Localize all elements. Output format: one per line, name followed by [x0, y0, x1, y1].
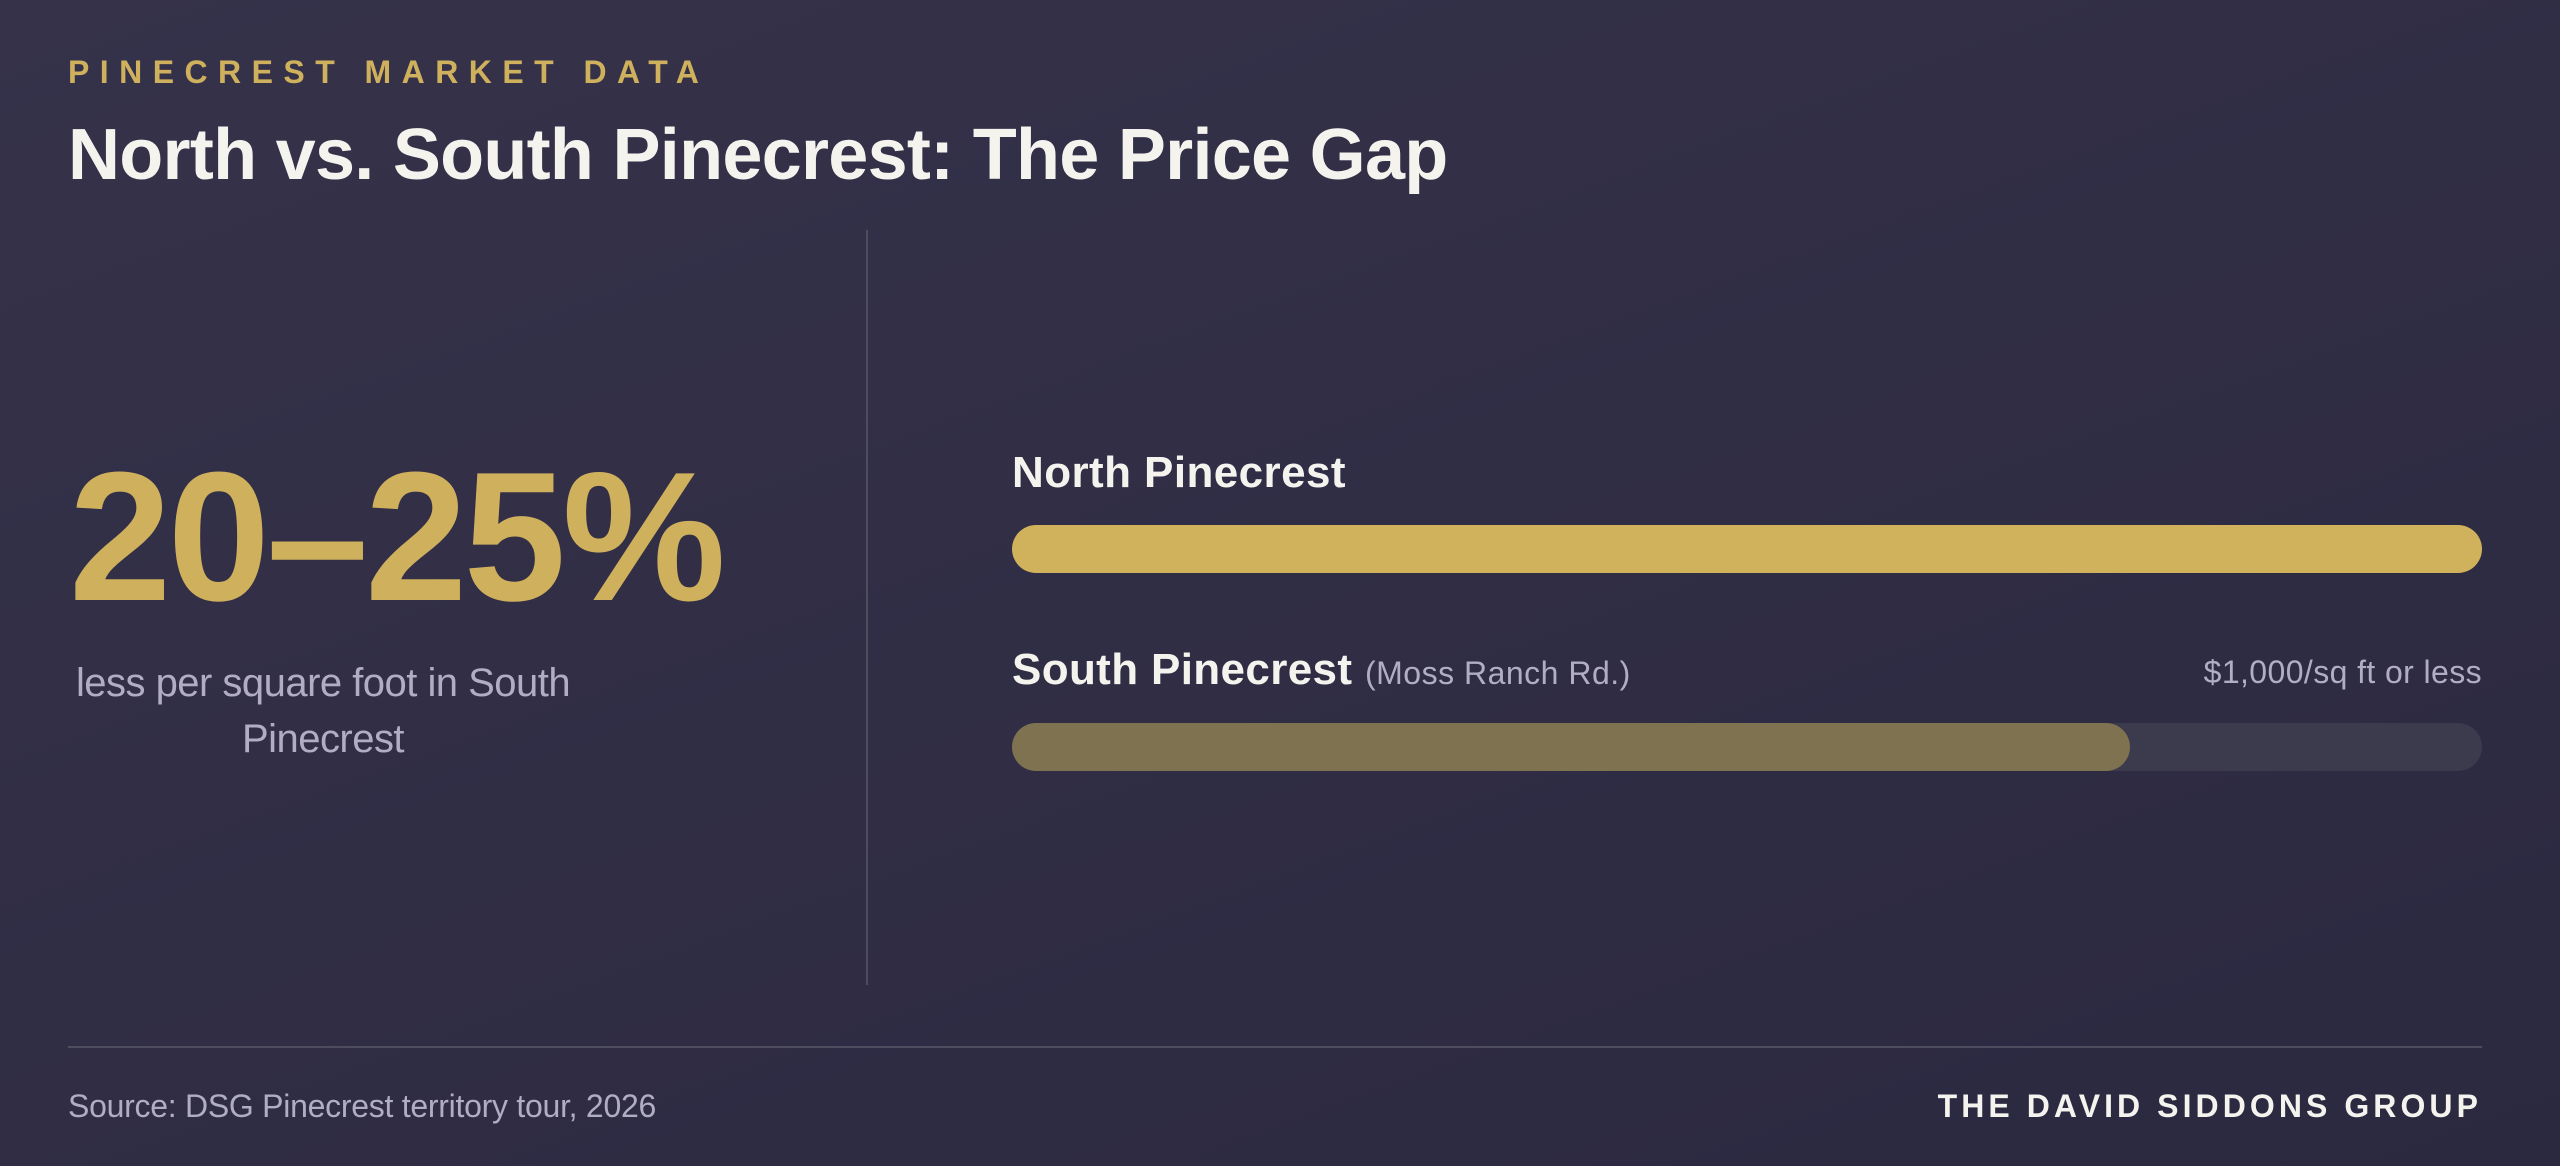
big number: 20–25%: 20–25% — [69, 433, 722, 639]
value: $1,000/sq ft or less: $1,000/sq ft or less — [2204, 654, 2482, 690]
footer source: Source: DSG Pinecrest territory tour, 2026 — [68, 1088, 656, 1124]
bar: South Pinecrest — [1012, 723, 2482, 771]
eyebrow: Pinecrest Market Data: PINECREST MARKET DATA — [68, 54, 709, 90]
panel: price comparison bars — [1012, 448, 2482, 771]
stat caption — [76, 661, 570, 761]
panel: headline statistic — [69, 433, 722, 761]
stat caption: Pinecrest — [242, 717, 404, 761]
bar: North Pinecrest — [1012, 525, 2482, 573]
label: North Pinecrest: North Pinecrest — [1012, 448, 1346, 497]
label: South Pinecrest (Moss Ranch Rd.): South Pinecrest (Moss Ranch Rd.) — [1012, 645, 1631, 694]
footer brand: THE DAVID SIDDONS GROUP — [1938, 1088, 2482, 1124]
stat caption: less per square foot in South — [76, 661, 570, 705]
title: North vs. South Pinecrest: The Price Gap — [68, 115, 1448, 195]
